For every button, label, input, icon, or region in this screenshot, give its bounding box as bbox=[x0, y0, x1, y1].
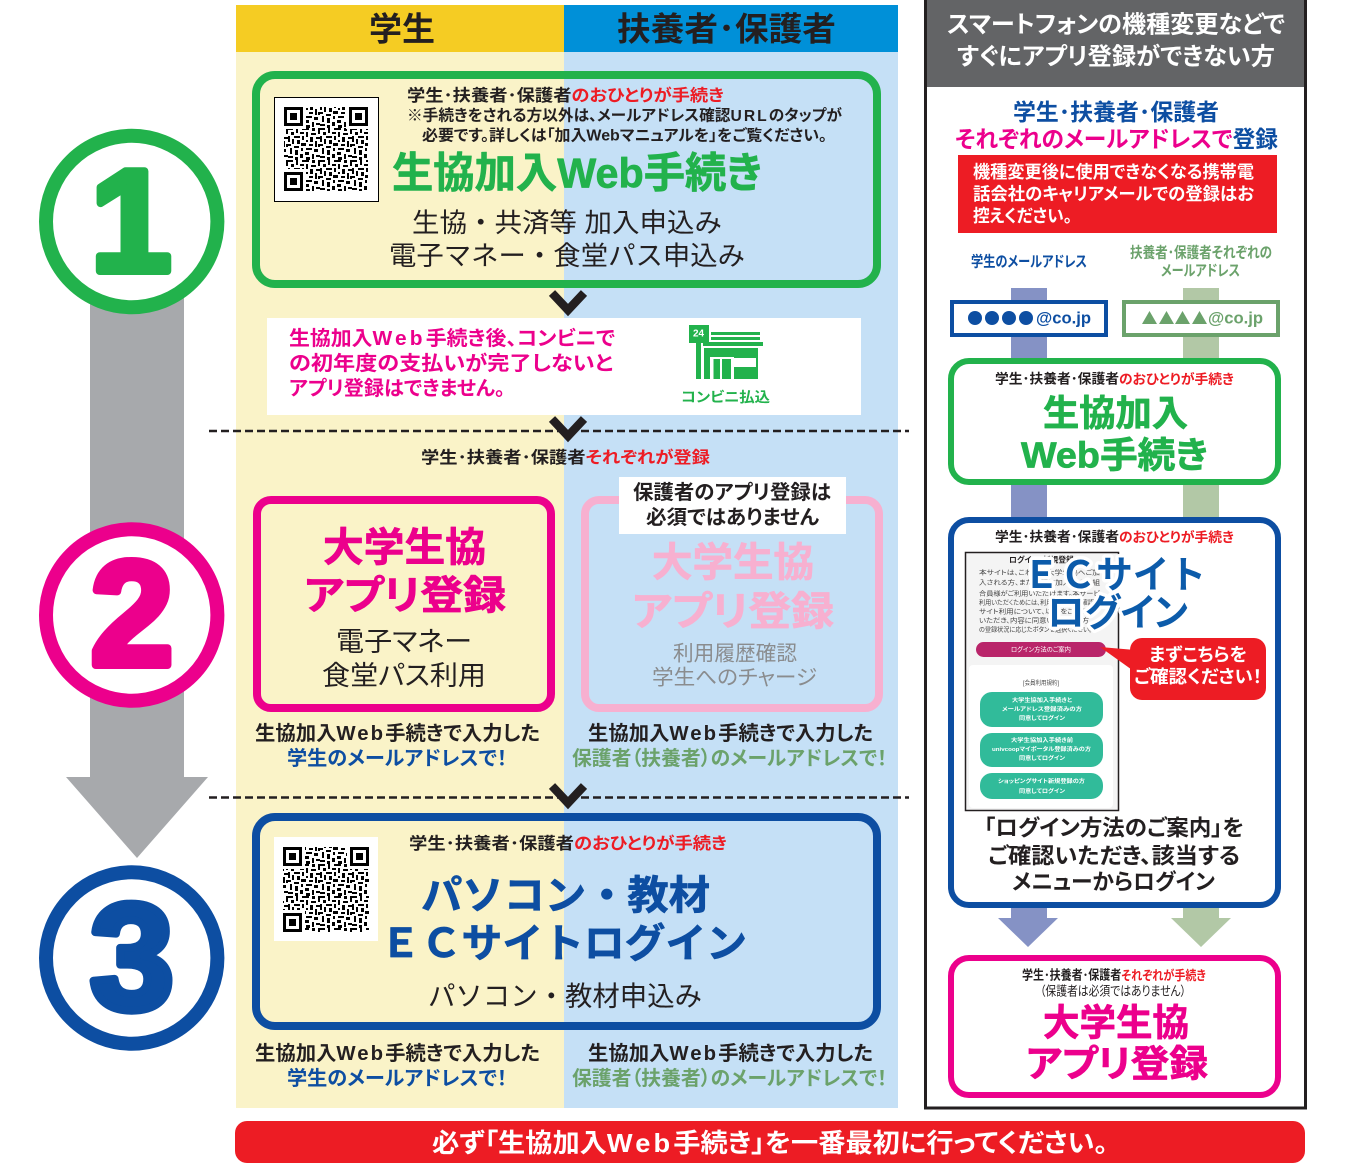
icon: convenience store: 24 bbox=[693, 328, 705, 340]
heading: student column bbox=[236, 5, 564, 52]
heading: guardian column bbox=[564, 5, 898, 52]
step number 1: 1 bbox=[91, 140, 171, 302]
text: login instructions: ご確認いただき、該当する bbox=[988, 844, 1240, 868]
screenshot: login page: 合員様がご利用いただけます。本サービ bbox=[979, 588, 1100, 598]
text: register with each email address bbox=[955, 99, 1278, 152]
text: login instructions: 「ログイン方法のご案内」を bbox=[984, 816, 1244, 840]
step number 3 bbox=[46, 872, 217, 1044]
panel: sidebar web procedure: 生協加入 bbox=[1043, 392, 1188, 434]
panel: step 3 EC site login bbox=[256, 817, 877, 1026]
caption: guardian address for app bbox=[572, 722, 887, 770]
screenshot: login page: 本サイトは、これから大学生協へご加 bbox=[979, 568, 1100, 576]
heading: guardian column: 扶養者･保護者 bbox=[617, 10, 836, 48]
button: login guide bbox=[976, 642, 1106, 657]
button: login option 2: 大学生協加入手続き前 bbox=[1011, 736, 1073, 744]
heading: sidebar: すぐにアプリ登録ができない方 bbox=[957, 42, 1275, 70]
label: student email: 学生のメールアドレス bbox=[971, 252, 1087, 270]
heading: student column: 学生 bbox=[369, 10, 435, 48]
button: login option 3 bbox=[980, 773, 1103, 799]
panel: step 1 web procedure: 学生･扶養者･保護者 のおひとりが手続き bbox=[407, 85, 724, 105]
panel: sidebar web procedure: 学生･扶養者･保護者のおひとりが手続き bbox=[995, 370, 1234, 386]
caption: guardian address for app: 保護者（扶養者）のメールアドレスで！ bbox=[572, 747, 887, 770]
panel: convenience store payment note: コンビニ払込 bbox=[681, 389, 770, 405]
panel: convenience store payment note: 生協加入Web手続き後、コンビニで bbox=[289, 327, 615, 350]
label: guardian email bbox=[1130, 244, 1272, 280]
arrow: student flow bbox=[998, 288, 1058, 947]
text: step 2 instruction: 学生･扶養者･保護者 それぞれが登録 bbox=[421, 447, 711, 467]
panel: student app registration: アプリ登録 bbox=[304, 574, 506, 618]
caption: student address for EC: 生協加入Web手続きで入力した bbox=[255, 1042, 540, 1065]
warning: career mail bbox=[958, 155, 1277, 233]
panel: sidebar for users who cannot register immediately bbox=[926, 0, 1306, 1108]
step number 2: 2 bbox=[91, 530, 173, 697]
caption: student address for app: 生協加入Web手続きで入力した bbox=[255, 722, 540, 745]
warning: career mail: 機種変更後に使用できなくなる携帯電 bbox=[973, 162, 1254, 182]
caption: student address for EC bbox=[255, 1042, 540, 1090]
button: login option 1 bbox=[980, 692, 1103, 727]
column background: student bbox=[236, 52, 564, 1108]
label: guardian email: メールアドレス bbox=[1161, 262, 1240, 280]
email box: student: @co.jp bbox=[1036, 308, 1091, 328]
panel: step 1 web procedure: 生協・共済等 加入申込み bbox=[412, 208, 722, 238]
panel: sidebar EC site login bbox=[951, 520, 1278, 905]
panel: step 3 EC site login: ＥＣサイトログイン bbox=[380, 922, 747, 966]
panel: convenience store payment note: アプリ登録はできません。 bbox=[289, 377, 505, 400]
panel: convenience store payment note: の初年度の支払いが完了しないと bbox=[289, 351, 613, 375]
panel: step 1 web procedure: 生協加入Web手続き bbox=[392, 150, 762, 196]
step number 2 bbox=[46, 529, 217, 701]
QR code: step 1 bbox=[274, 98, 378, 202]
screenshot: login page: 入される方、または既に加入済みの組 bbox=[979, 578, 1101, 586]
panel: sidebar app registration: 大学生協 bbox=[1043, 1002, 1189, 1044]
warning: career mail: 控えください。 bbox=[973, 206, 1072, 226]
callout: check here first: ご確認ください！ bbox=[1134, 666, 1262, 687]
caption: guardian address for app: 生協加入Web手続きで入力した bbox=[588, 722, 873, 745]
screenshot: login page bbox=[966, 552, 1118, 810]
caption: student address for app: 学生のメールアドレスで！ bbox=[287, 747, 507, 770]
caption: guardian address for EC bbox=[572, 1042, 887, 1090]
arrow: chevron before step 2 bbox=[552, 419, 584, 436]
panel: sidebar web procedure bbox=[951, 361, 1278, 482]
panel: guardian app registration (optional): 利用履歴確認 bbox=[673, 642, 797, 666]
caption: guardian address for EC: 保護者（扶養者）のメールアドレスで！ bbox=[572, 1067, 887, 1090]
banner: do web procedure first: 必ず「生協加入 Web手続き」を一番最初に行ってください。 bbox=[432, 1128, 1108, 1158]
QR code: step 3 bbox=[274, 837, 378, 941]
callout: guardian registration not required: 必須ではありません bbox=[646, 506, 820, 529]
screenshot: login page: [会員利用規約] bbox=[1023, 679, 1059, 687]
screenshot: login page: いただき、内容に同意いただける方 bbox=[979, 616, 1090, 624]
panel: step 1 web procedure: ※手続きをされる方以外は、メールアドレス確認URLのタップが bbox=[407, 106, 843, 124]
button: login option 2 bbox=[980, 733, 1103, 767]
panel: student app registration bbox=[257, 500, 551, 708]
button: login option 2: 同意してログイン bbox=[1019, 754, 1066, 762]
column background: guardian bbox=[564, 52, 898, 1108]
email box: student bbox=[952, 302, 1106, 335]
screenshot: login page: 利用いただくためには、利用規約等をご確認下 bbox=[979, 598, 1100, 606]
button: login option 2: univcoopマイポータル登録済みの方 bbox=[992, 745, 1091, 753]
callout: guardian registration not required: 保護者のアプリ登録は bbox=[633, 481, 831, 504]
banner: do web procedure first bbox=[235, 1121, 1305, 1163]
callout: check here first bbox=[1100, 638, 1266, 700]
arrow: guardian flow bbox=[1171, 288, 1231, 947]
panel: student app registration: 電子マネー bbox=[336, 627, 472, 657]
text: login instructions: メニューからログイン bbox=[1012, 870, 1215, 894]
title: sidebar EC site bbox=[1023, 555, 1206, 635]
panel: step 3 EC site login: 学生･扶養者･保護者 のおひとりが手続き bbox=[409, 833, 727, 853]
step number 1 bbox=[46, 136, 217, 307]
panel: step 3 EC site login: パソコン・教材申込み bbox=[428, 980, 702, 1012]
warning: career mail: 話会社のキャリアメールでの登録はお bbox=[973, 184, 1254, 204]
arrow: chevron before step 3 bbox=[552, 786, 584, 803]
text: login instructions bbox=[984, 816, 1244, 894]
step number 3: 3 bbox=[90, 872, 174, 1041]
panel: sidebar web procedure: Web手続き bbox=[1021, 434, 1208, 476]
screenshot: login page: の登録状況に応じたボタンを選択ください。 bbox=[979, 624, 1092, 634]
panel: step 1 web procedure: 必要です。詳しくは「加入Webマニュアルを」をご覧ください。 bbox=[422, 126, 827, 144]
arrow: overall flow bbox=[66, 290, 208, 858]
button: login option 3: 同意してログイン bbox=[1019, 787, 1066, 795]
button: login option 3: ショッピングサイト新規登録の方 bbox=[998, 777, 1085, 785]
panel: guardian app registration (optional) bbox=[585, 477, 879, 708]
email box: guardian: @co.jp bbox=[1208, 308, 1263, 328]
email box: guardian bbox=[1124, 302, 1278, 335]
caption: guardian address for EC: 生協加入Web手続きで入力した bbox=[588, 1042, 873, 1065]
panel: sidebar app registration: 学生･扶養者･保護者それぞれが手続き bbox=[1022, 968, 1206, 982]
screenshot: login page: サイト利用について、以下をご確認 bbox=[979, 606, 1090, 616]
panel: sidebar app registration bbox=[951, 958, 1278, 1095]
panel: step 3 EC site login: パソコン・教材 bbox=[421, 874, 710, 918]
icon: convenience store bbox=[689, 325, 763, 379]
panel: sidebar EC site login: 学生･扶養者･保護者のおひとりが手続き bbox=[995, 528, 1234, 544]
callout: guardian registration not required bbox=[619, 477, 846, 534]
button: login option 1: 大学生協加入手続きと bbox=[1012, 696, 1072, 704]
caption: student address for EC: 学生のメールアドレスで！ bbox=[287, 1067, 507, 1090]
button: login guide: ログイン方法のご案内 bbox=[1011, 644, 1071, 654]
heading: sidebar bbox=[927, 0, 1304, 87]
title: sidebar EC site: ログイン bbox=[1047, 593, 1188, 635]
text: register with each email address: それぞれのメールアドレスで登録 bbox=[955, 126, 1278, 152]
panel: guardian app registration (optional): アプリ登録 bbox=[632, 590, 834, 634]
panel: convenience store payment note bbox=[267, 318, 861, 415]
panel: sidebar app registration: アプリ登録 bbox=[1026, 1044, 1208, 1084]
callout: check here first: まずこちらを bbox=[1149, 645, 1247, 665]
panel: step 1 web procedure: 電子マネー・食堂パス申込み bbox=[389, 241, 745, 271]
panel: student app registration: 食堂パス利用 bbox=[322, 661, 486, 691]
heading: sidebar: スマートフォンの機種変更などで bbox=[947, 12, 1285, 38]
panel: step 1 web procedure bbox=[256, 75, 877, 284]
button: login option 1: 同意してログイン bbox=[1019, 714, 1066, 722]
panel: sidebar app registration: （保護者は必須ではありません） bbox=[1040, 984, 1186, 998]
panel: guardian app registration (optional): 学生へのチャージ bbox=[652, 666, 817, 690]
button: login option 1: メールアドレス登録済みの方 bbox=[1002, 705, 1082, 713]
arrow: chevron after step 1 bbox=[552, 293, 584, 310]
panel: student app registration: 大学生協 bbox=[323, 526, 486, 570]
text: register with each email address: 学生･扶養者･保護者 bbox=[1013, 99, 1219, 125]
screenshot: login page: ログイン・新規登録 bbox=[1009, 554, 1074, 564]
panel: guardian app registration (optional): 大学生協 bbox=[652, 541, 814, 585]
title: sidebar EC site: ＥＣサイト bbox=[1023, 555, 1206, 597]
label: guardian email: 扶養者･保護者それぞれの bbox=[1130, 244, 1272, 262]
caption: student address for app bbox=[255, 722, 540, 770]
